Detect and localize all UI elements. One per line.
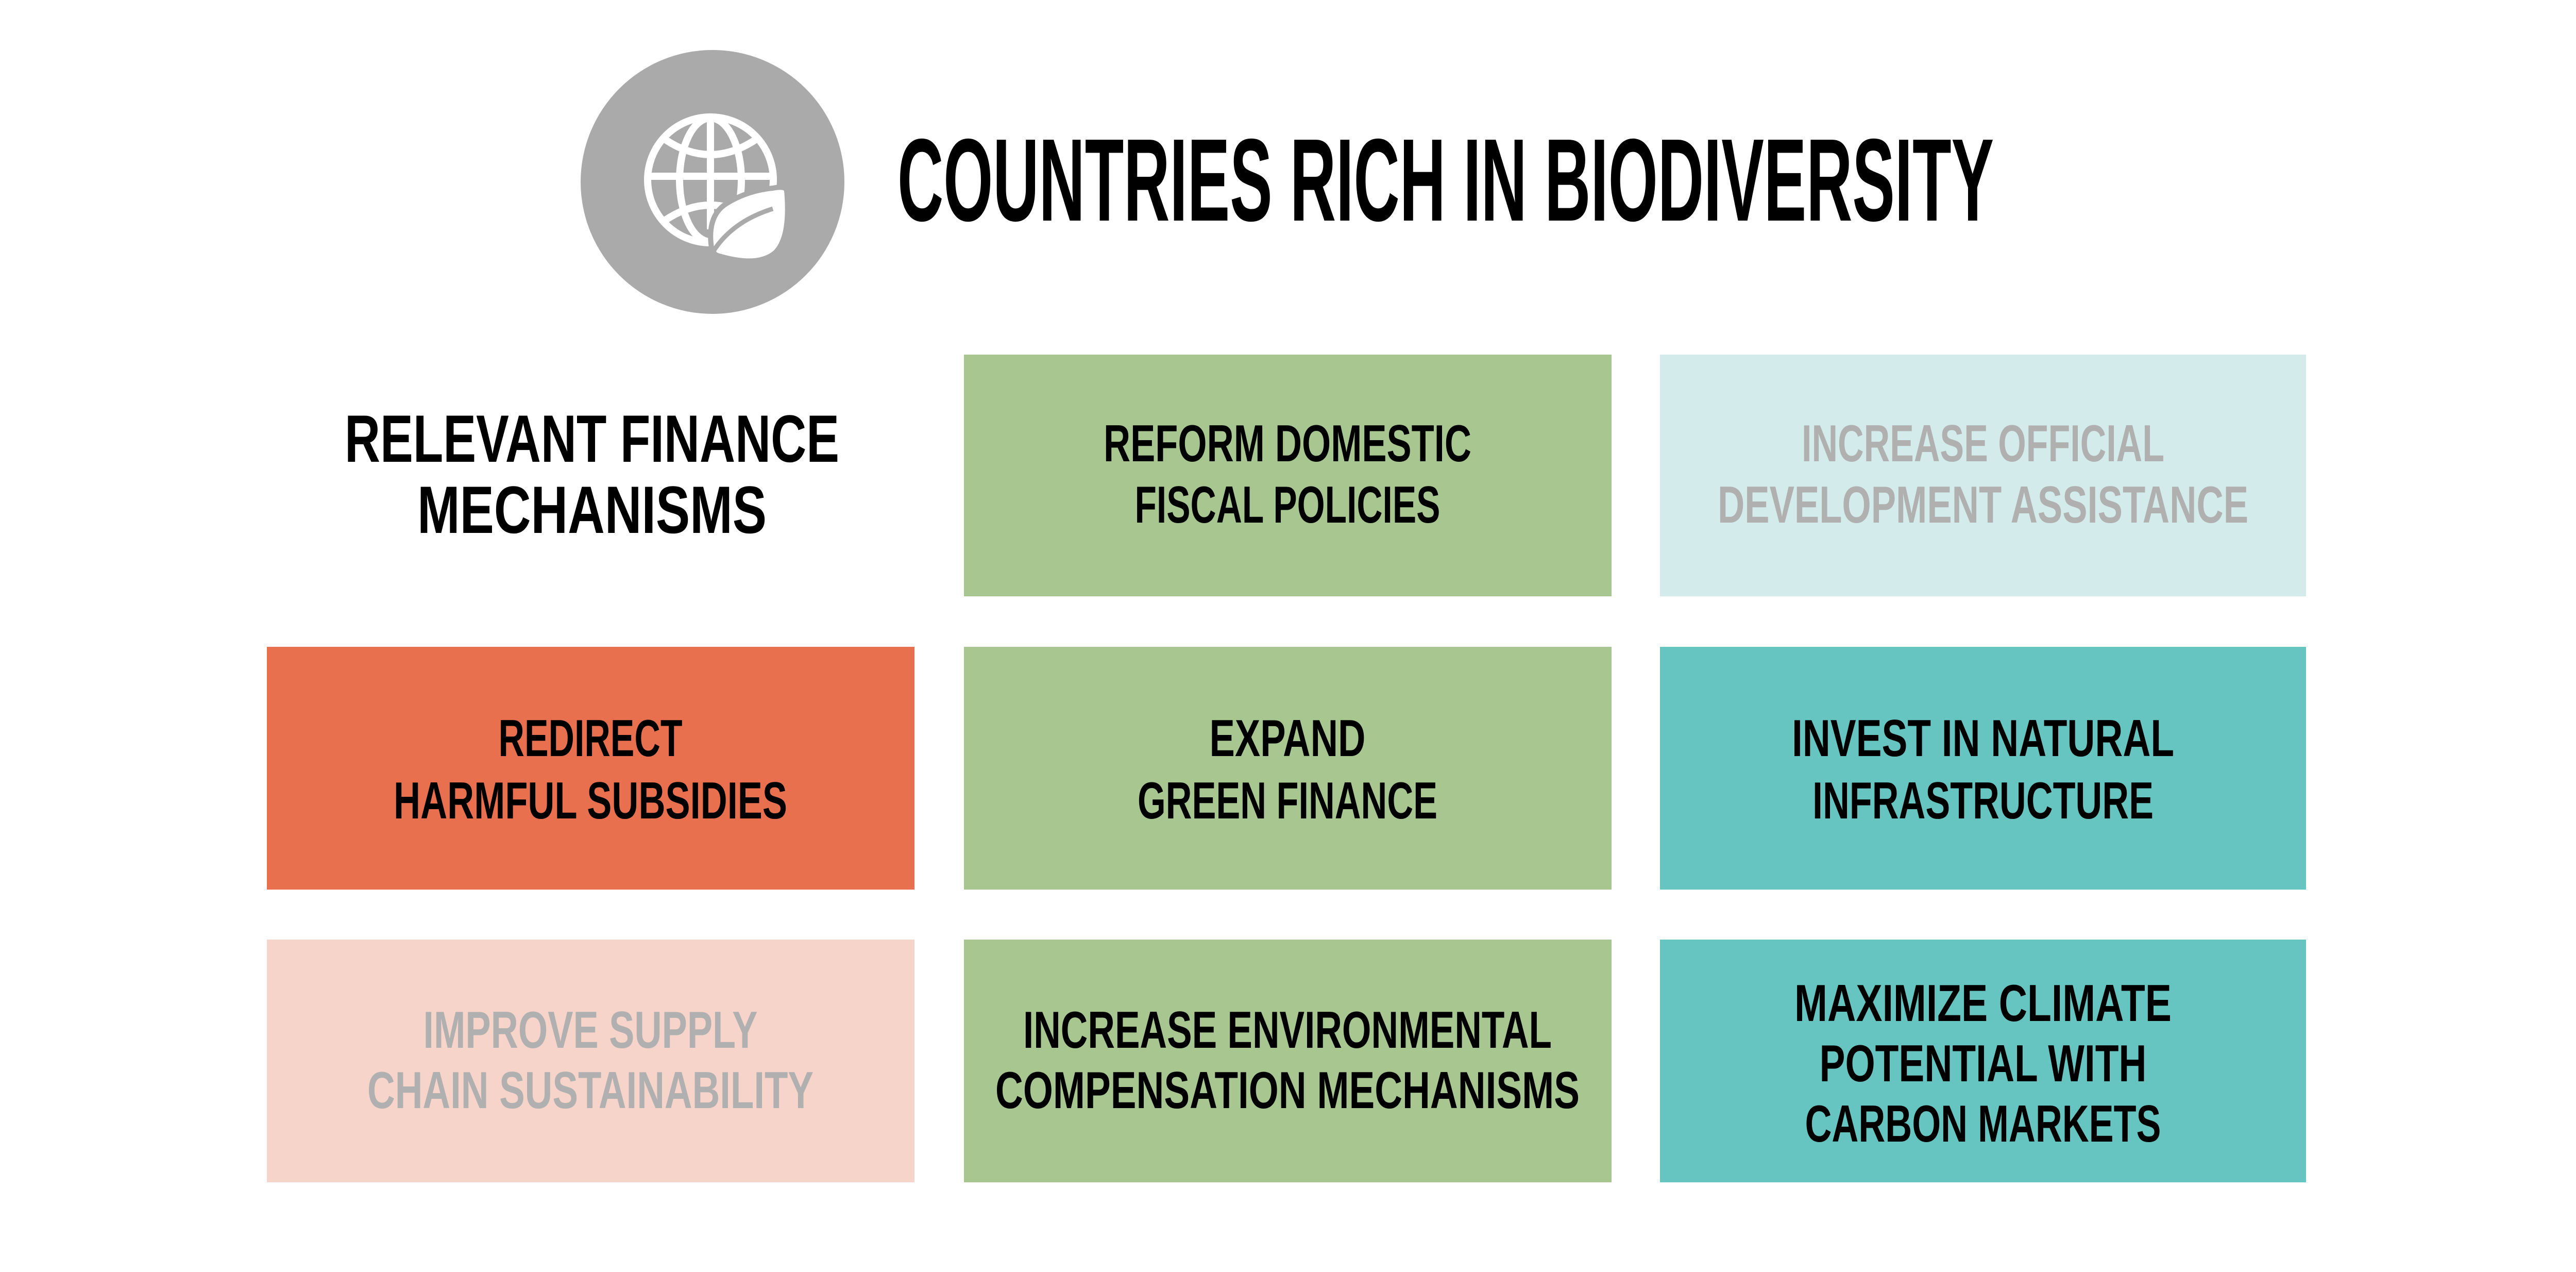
panel: increase environmental compensation mechanisms: COMPENSATION MECHANISMS xyxy=(995,1062,1580,1119)
panel: improve supply chain sustainability xyxy=(267,940,914,1182)
panel: invest in natural infrastructure: INVEST IN NATURAL xyxy=(1792,710,2174,767)
panel: improve supply chain sustainability: CHAIN SUSTAINABILITY xyxy=(367,1062,814,1119)
heading: relevant finance mechanisms: MECHANISMS xyxy=(417,472,767,547)
panel: expand green finance xyxy=(964,647,1612,890)
panel: increase official development assistance xyxy=(1660,355,2306,596)
panel: reform domestic fiscal policies: FISCAL POLICIES xyxy=(1134,476,1440,534)
panel: improve supply chain sustainability: IMPROVE SUPPLY xyxy=(423,1001,757,1059)
panel: invest in natural infrastructure xyxy=(1660,647,2306,890)
panel: maximize climate potential with carbon markets xyxy=(1660,940,2306,1182)
panel: redirect harmful subsidies: REDIRECT xyxy=(499,710,682,767)
panel: increase environmental compensation mechanisms xyxy=(964,940,1612,1182)
panel: reform domestic fiscal policies: REFORM DOMESTIC xyxy=(1104,415,1471,473)
panel: maximize climate potential with carbon markets: POTENTIAL WITH xyxy=(1820,1035,2146,1093)
panel: maximize climate potential with carbon markets: CARBON MARKETS xyxy=(1805,1095,2161,1153)
panel: increase official development assistance: DEVELOPMENT ASSISTANCE xyxy=(1718,476,2248,534)
panel: maximize climate potential with carbon markets: MAXIMIZE CLIMATE xyxy=(1794,975,2172,1032)
panel: reform domestic fiscal policies xyxy=(964,355,1612,596)
panel: redirect harmful subsidies: HARMFUL SUBSIDIES xyxy=(394,772,787,830)
panel: increase official development assistance: INCREASE OFFICIAL xyxy=(1802,415,2164,473)
panel: increase environmental compensation mechanisms: INCREASE ENVIRONMENTAL xyxy=(1023,1001,1552,1059)
panel: redirect harmful subsidies xyxy=(267,647,914,890)
icon: globe with leaf xyxy=(581,50,844,314)
heading: relevant finance mechanisms: RELEVANT FINANCE xyxy=(345,401,839,476)
panel: invest in natural infrastructure: INFRASTRUCTURE xyxy=(1812,772,2154,830)
panel: expand green finance: EXPAND xyxy=(1210,710,1365,767)
heading: relevant finance mechanisms xyxy=(345,401,839,547)
panel: expand green finance: GREEN FINANCE xyxy=(1138,772,1437,830)
